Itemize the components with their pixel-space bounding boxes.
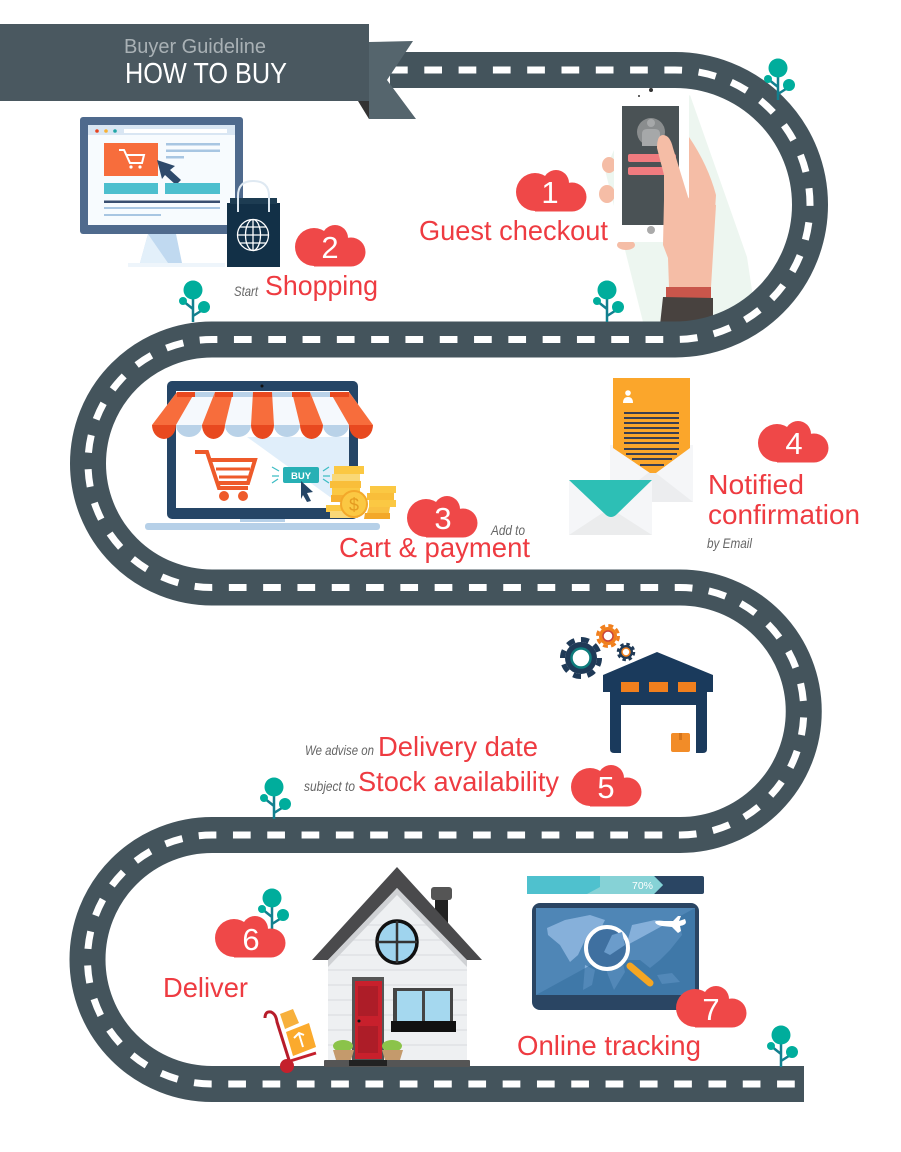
- illustration: hand holding phone: [599, 88, 753, 325]
- cloud: step 3: 3: [434, 501, 452, 536]
- tree: bottom right: [767, 1026, 798, 1067]
- cloud: step 5: [571, 765, 642, 806]
- label: deliver: Deliver: [163, 972, 248, 1003]
- label: start shopping: Start: [234, 283, 259, 299]
- road: [88, 70, 810, 1084]
- label: guest checkout: Guest checkout: [419, 215, 608, 246]
- step 5: gears: [562, 626, 634, 676]
- cloud: step 1: [516, 170, 586, 212]
- step 7: progress bar: [527, 876, 704, 894]
- banner subtitle: Buyer Guideline: [124, 36, 266, 58]
- label: delivery date and stock availability: Delivery date: [378, 731, 538, 762]
- cloud: step 2: 2: [321, 230, 339, 265]
- label: notified confirmation by email: confirmation: [708, 499, 860, 530]
- label: delivery date and stock availability: We advise on: [305, 742, 374, 758]
- label: notified confirmation by email: Notified: [708, 469, 804, 500]
- icon: shopping bag with globe: [227, 181, 280, 267]
- step 6: house: [312, 867, 482, 1067]
- awning: [152, 392, 373, 439]
- icon: gold coins: $: [349, 495, 359, 515]
- cloud: step 6: 6: [242, 922, 260, 957]
- cloud: step 7: [676, 986, 746, 1028]
- cloud: step 3: [407, 496, 478, 538]
- cloud: step 2: [295, 225, 366, 266]
- tree: behind cloud 6: [258, 888, 289, 930]
- label: delivery date and stock availability: Stock availability: [358, 766, 559, 797]
- tree: top right: [764, 58, 795, 100]
- buy button: BUY: [291, 471, 312, 482]
- label: delivery date and stock availability: subject to: [304, 778, 355, 794]
- cloud: step 5: 5: [597, 770, 615, 805]
- step 7: tablet with world map: [532, 903, 699, 1010]
- cloud: step 4: [758, 421, 828, 462]
- banner: [0, 24, 416, 119]
- icon: gold coins: [326, 466, 396, 519]
- tree: by step 5: [260, 778, 291, 819]
- step 7: progress bar: 70%: [632, 880, 653, 892]
- label: start shopping: Shopping: [265, 270, 378, 301]
- cloud: step 4: 4: [785, 426, 803, 461]
- label: online tracking: Online tracking: [517, 1030, 701, 1061]
- step 5: warehouse: [603, 652, 713, 753]
- step 3: online store laptop: [145, 381, 396, 530]
- banner title: HOW TO BUY: [125, 58, 287, 90]
- icon: orange cart: [195, 452, 255, 501]
- tree: by step 1: [593, 280, 624, 322]
- label: delivery date and stock availability: [304, 731, 559, 797]
- tree: by step 2: [179, 280, 210, 322]
- step 4: envelopes with letter: [569, 378, 693, 535]
- cloud: step 7: 7: [702, 992, 720, 1027]
- step 2: monitor: [80, 117, 243, 267]
- buy button: [272, 467, 330, 502]
- label: add to cart and payment: Cart & payment: [339, 532, 530, 563]
- label: add to cart and payment: Add to: [490, 522, 525, 538]
- icon: hand truck with boxes: [265, 1009, 316, 1073]
- cloud: step 1: 1: [541, 175, 559, 210]
- label: notified confirmation by email: by Email: [707, 535, 753, 551]
- label: notified confirmation by email: [707, 469, 860, 551]
- cloud: step 6: [215, 916, 286, 958]
